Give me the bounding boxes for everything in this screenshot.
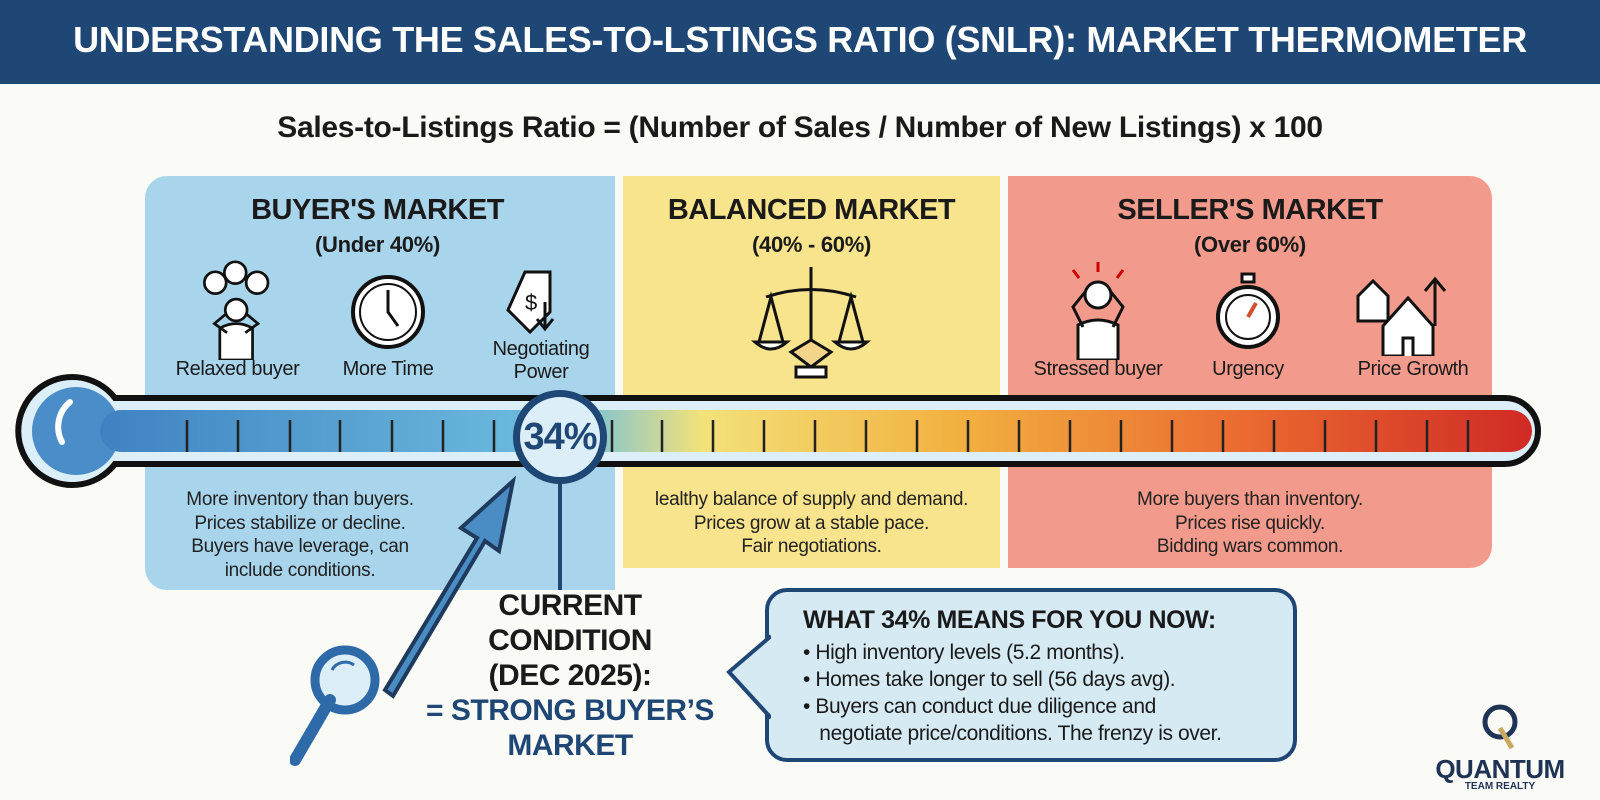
range: over 60: (Over 60%) [1194,232,1306,257]
description: balanced: Prices grow at a stable pace. [694,512,929,534]
label: price growth: Price Growth [1358,358,1468,380]
icon: stressed buyer [1071,262,1125,360]
panel: seller's market [1008,176,1492,568]
indicator: 34% circle [513,390,607,484]
heading: buyer's market: BUYER'S MARKET [251,194,504,226]
label: negotiating power: Negotiating Power [493,338,589,383]
callout bullets: negotiate price/conditions. The frenzy is over. [819,722,1222,745]
description: seller [1137,489,1363,557]
callout: what 34% means [765,588,1297,762]
logo: quantum team realty: QUANTUM [1435,754,1565,784]
description: balanced: lealthy balance of supply and demand. [655,489,968,510]
description: buyer: Buyers have leverage, can [191,536,409,557]
range: 40-60: (40% - 60%) [752,232,871,257]
header bar: UNDERSTANDING THE SALES-TO-LSTINGS RATIO (SNLR): MARKET THERMOMETER [73,19,1527,60]
icon: relaxed buyer [203,260,270,360]
callout bullets: • Buyers can conduct due diligence and [803,695,1156,718]
description: seller: Prices rise quickly. [1175,512,1325,534]
callout heading: WHAT 34% MEANS FOR YOU NOW: [803,606,1216,634]
range: under 40: (Under 40%) [315,232,440,257]
label: more time: More Time [343,358,433,380]
current condition text: CURRENT [498,589,642,622]
panel: balanced market [623,176,1000,568]
header bar [0,0,1600,84]
description: buyer: Prices stabilize or decline. [194,512,406,534]
description: buyer: More inventory than buyers. [186,489,414,510]
icon: price growth houses [1356,276,1446,356]
thermometer [15,374,1541,590]
current condition text [426,589,714,762]
arrow and magnifier [290,476,516,766]
panel: buyer's market [145,176,615,590]
current condition text: (DEC 2025): [489,659,651,692]
icon: clock [351,275,425,349]
logo: quantum team realty: TEAM REALTY [1465,781,1535,792]
indicator: 34% circle: 34% [523,416,597,458]
heading: balanced market: BALANCED MARKET [668,194,955,226]
description: seller: More buyers than inventory. [1137,489,1363,510]
callout bullets [803,641,1222,745]
icon: price tag: $ [525,290,537,315]
label: stressed buyer: Stressed buyer [1034,358,1162,380]
description: balanced [655,489,968,557]
icon: scales with handshake [751,267,871,378]
logo: quantum team realty [1435,704,1565,792]
formula: Sales-to-Listings Ratio = (Number of Sales / Number of New Listings) x 100 [277,111,1323,144]
description: buyer [186,489,414,580]
description: seller: Bidding wars common. [1157,536,1343,557]
current condition text: CONDITION [488,624,652,657]
current condition text: MARKET [507,729,633,762]
description: buyer: include conditions. [225,560,375,580]
description: balanced: Fair negotiations. [741,536,882,557]
label: urgency: Urgency [1212,358,1284,380]
heading: seller's market: SELLER'S MARKET [1117,194,1383,226]
current condition text: = STRONG BUYER’S [426,694,714,727]
callout bullets: • Homes take longer to sell (56 days avg). [803,668,1175,691]
icon: stopwatch [1216,272,1280,349]
icon: price tag [506,270,554,334]
callout bullets: • High inventory levels (5.2 months). [803,641,1125,664]
label: relaxed buyer: Relaxed buyer [176,358,299,380]
callout pointer [726,634,771,720]
